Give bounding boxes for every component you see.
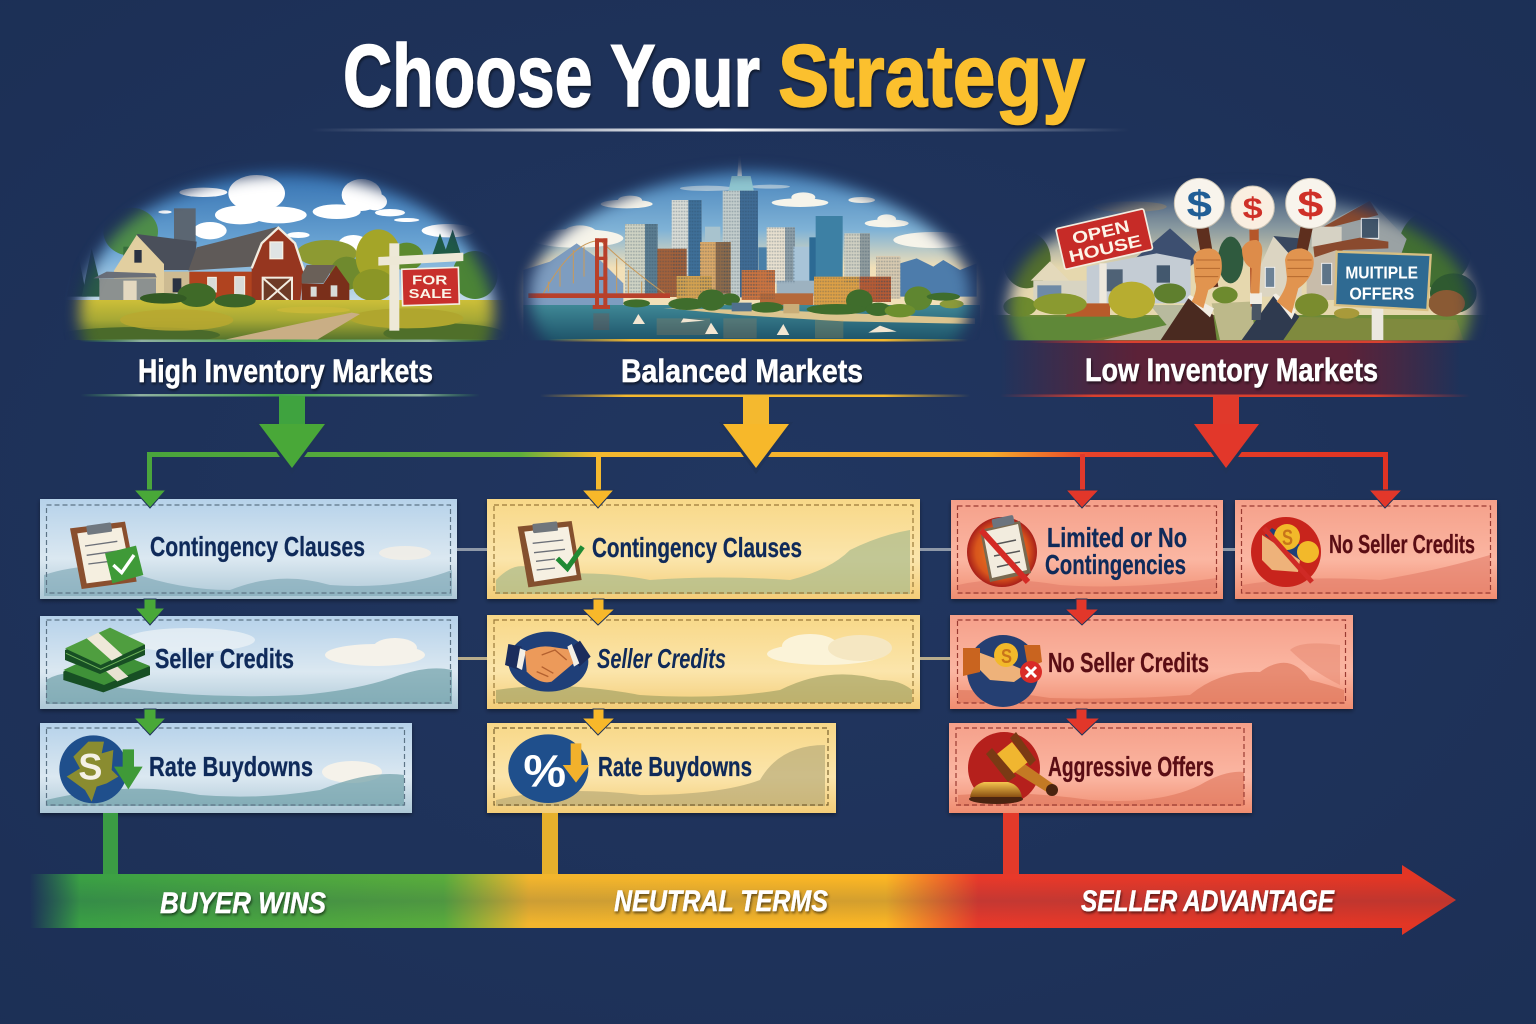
icon: hands passing coin with x badge: S — [1001, 646, 1012, 668]
illustration: city skyline and bridge — [510, 150, 990, 342]
icon: multiple offers sign: MUITIPLE — [1345, 262, 1418, 282]
icon: hands passing coin with x badge — [963, 635, 1042, 707]
card: limited or no contingencies — [951, 500, 1223, 599]
label: contingency clauses: Contingency Clauses — [592, 532, 802, 563]
label: no seller credits: No Seller Credits — [1329, 529, 1475, 559]
arrow: low inventory down — [1190, 396, 1263, 474]
card: no seller credits (top) — [1235, 500, 1497, 599]
heading: high inventory markets: High Inventory Markets — [138, 353, 433, 389]
heading: balanced markets: Balanced Markets — [621, 353, 863, 389]
arrow: high inventory down — [255, 396, 329, 474]
column: balanced strategies — [487, 499, 920, 813]
icon: open house sign: HOUSE — [1067, 231, 1143, 266]
column: seller strategies — [949, 500, 1497, 813]
icon: raised bidding paddles — [1161, 178, 1336, 340]
connectors between columns — [457, 548, 1235, 660]
icon: percent with down arrow — [508, 734, 589, 803]
card: contingency clauses (balanced) — [487, 499, 920, 599]
icon: multiple offers sign — [1335, 252, 1431, 340]
card: rate buydowns (balanced) — [487, 723, 836, 813]
icon: for sale sign — [378, 243, 463, 331]
icon: coins and hand crossed out: S — [1282, 525, 1293, 550]
label: seller credits: Seller Credits — [155, 643, 294, 674]
label: seller credits: Seller Credits — [597, 643, 726, 674]
illustration: farmhouse and barn for sale — [68, 164, 505, 340]
icon: clipboard crossed out — [967, 515, 1037, 587]
title: Choose Your — [343, 26, 760, 125]
icon: clipboard with check mark — [518, 521, 583, 587]
icon: coins and hand crossed out — [1251, 517, 1321, 587]
label: no seller credits: No Seller Credits — [1048, 647, 1209, 678]
icon: stacks of cash — [63, 628, 150, 692]
label: neutral terms: NEUTRAL TERMS — [614, 885, 828, 918]
label: limited or no contingencies — [1045, 522, 1187, 580]
spectrum arrow: buyer to seller — [30, 865, 1456, 935]
icon: open house sign — [1056, 209, 1153, 270]
card: seller credits (buyer) — [40, 616, 458, 709]
icon: raised bidding paddles: $ — [1243, 193, 1263, 226]
card: no seller credits (middle) — [950, 615, 1353, 709]
icon: for sale sign: SALE — [409, 286, 452, 301]
arrows: red flow — [1065, 490, 1402, 735]
arrows: yellow flow — [582, 490, 615, 735]
illustration: open house bidding scene — [998, 178, 1482, 340]
label: rate buydowns: Rate Buydowns — [598, 751, 752, 782]
icon: open house sign: OPEN — [1070, 217, 1131, 248]
title: Strategy — [778, 26, 1085, 125]
column: buyer strategies — [40, 499, 458, 813]
panel: high inventory market — [68, 164, 505, 396]
arrows: green flow — [134, 490, 166, 735]
icon: handshake — [505, 632, 591, 692]
icon: raised bidding paddles: $ — [1187, 183, 1212, 225]
icon: clipboard with green check — [70, 522, 143, 589]
icon: dollar badge with down arrow — [59, 735, 143, 803]
label: buyer wins: BUYER WINS — [160, 887, 326, 920]
panel: balanced market — [510, 150, 990, 397]
card: rate buydowns (buyer) — [40, 723, 412, 813]
panel: low inventory market — [998, 178, 1482, 397]
icon: percent with down arrow: % — [523, 746, 566, 797]
label: limited or no contingencies: Contingencies — [1045, 549, 1186, 580]
icon: dollar badge with down arrow: S — [78, 745, 102, 787]
card: aggressive offers — [949, 723, 1252, 813]
card: contingency clauses (buyer) — [40, 499, 457, 599]
heading: low inventory markets: Low Inventory Markets — [1085, 352, 1378, 388]
icon: gavel — [968, 732, 1058, 804]
label: rate buydowns: Rate Buydowns — [149, 751, 313, 782]
icon: multiple offers sign: OFFERS — [1349, 283, 1414, 303]
label: seller advantage: SELLER ADVANTAGE — [1081, 885, 1335, 918]
icon: for sale sign: FOR — [412, 273, 448, 288]
label: contingency clauses: Contingency Clauses — [150, 531, 365, 562]
arrow: balanced down — [719, 396, 793, 474]
card: seller credits (balanced) — [487, 615, 920, 709]
label: aggressive offers: Aggressive Offers — [1048, 751, 1214, 782]
connector: horizontal distribution bar — [147, 452, 1388, 494]
connector stems to spectrum arrow — [103, 813, 1019, 877]
icon: raised bidding paddles: $ — [1297, 183, 1324, 225]
label: limited or no contingencies: Limited or No — [1047, 522, 1187, 553]
